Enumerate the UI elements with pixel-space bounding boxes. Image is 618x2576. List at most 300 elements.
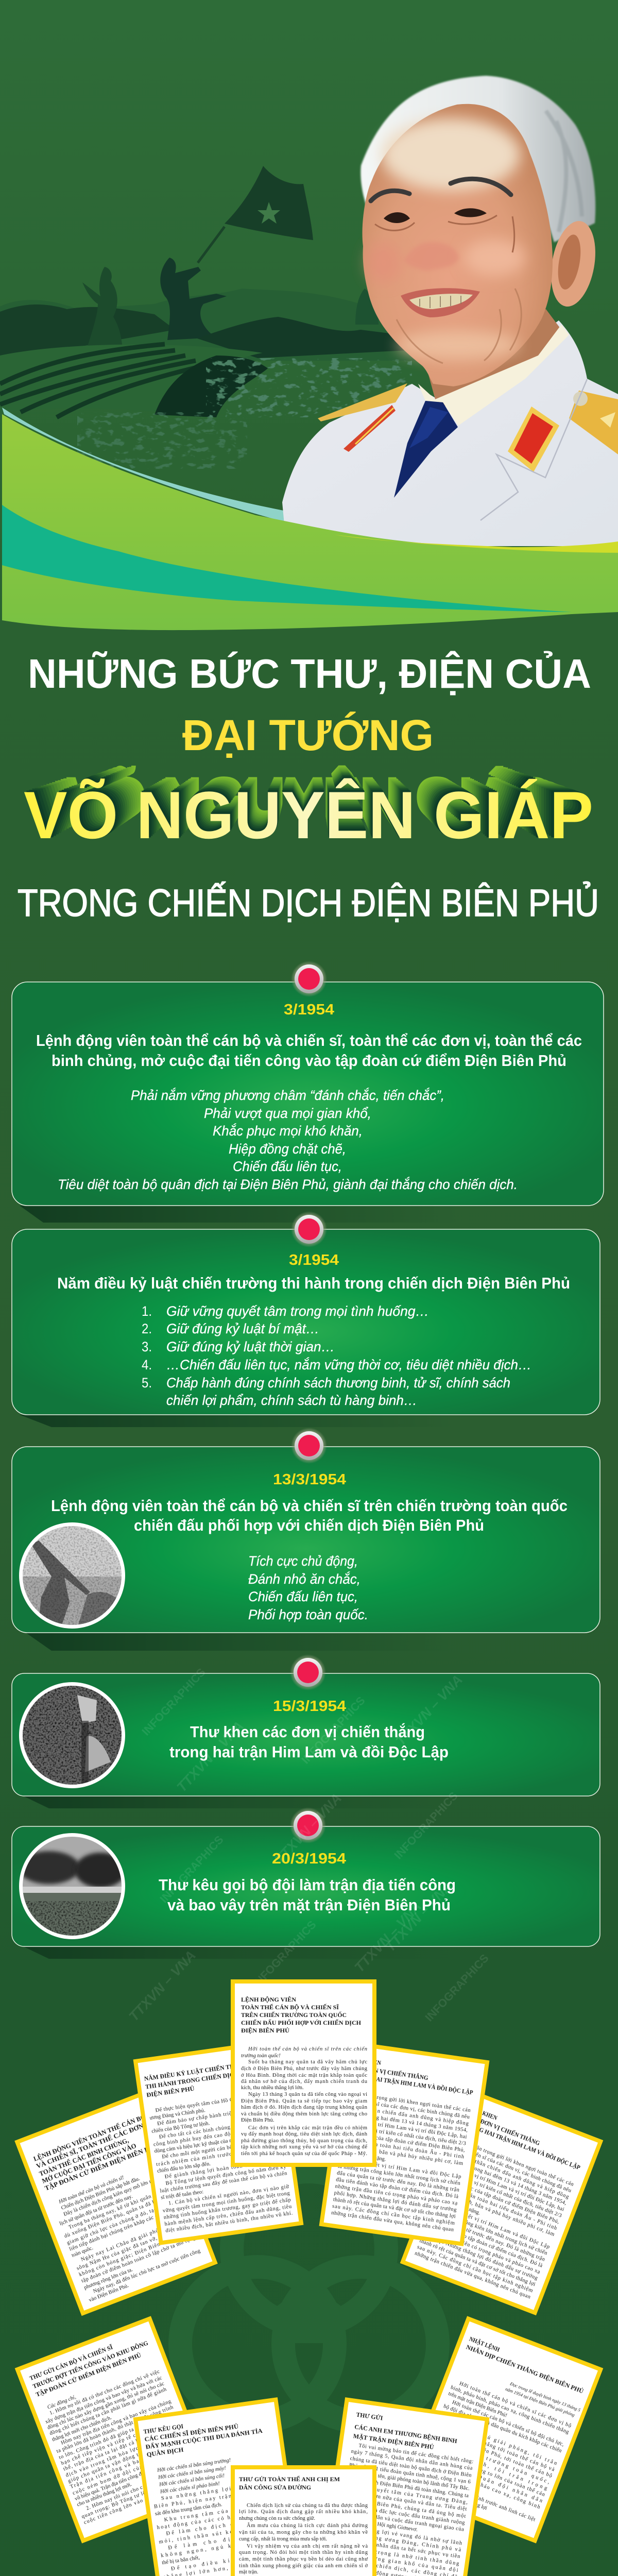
document: right lower: tuyến, quan trọng là nhờ tinh thần dũng [337, 2544, 460, 2567]
document: right lower: cảm, chịu đựng gian khổ của quân đội [336, 2551, 458, 2573]
timeline dot [290, 1654, 326, 1690]
document: far right lower: trường toàn quốc! [440, 2410, 478, 2429]
document: centre upper: phá đường giao thông thủy, bộ quan trọng của địch, [241, 2138, 367, 2144]
watermarks above documents: INFOGRAPHICS [422, 1952, 491, 2024]
document: left upper: Để cho tất cả các binh chủng bộ binh, pháo binh, [159, 2117, 280, 2140]
watermarks above documents: INFOGRAPHICS [250, 1918, 319, 1990]
document: far left lower: quan trọng: Bộ Tổng tư lệnh quyết định mở đợt [81, 2470, 199, 2520]
nose [404, 242, 459, 271]
document: far left lower: giúp cho quân ta vận động tiếp cận quân địch. [67, 2434, 185, 2484]
document: centre upper: hãm địch ở đó. Hiện địch đang tập trung không quân [241, 2105, 368, 2110]
timeline dot [291, 1211, 327, 1247]
date: 3/1954 [289, 1252, 339, 1268]
document: far right lower: sĩ đã hy sinh oanh liệt cho thắng lợi [414, 2479, 488, 2512]
document: centre upper: TOÀN THỂ CÁN BỘ VÀ CHIẾN SĨ [241, 2003, 339, 2011]
document: centre upper: địch ở Điện Biên Phủ, như trước đây vây hãm chúng [241, 2066, 368, 2072]
document: left lower [133, 2397, 303, 2576]
document: far right upper: đấu của quân ta từ trước đến nay. Đó là những trận [428, 2213, 546, 2263]
document: far right upper: bộ và chiến sĩ của các đơn vị, các binh chủng đã nêu [455, 2144, 572, 2194]
tie [394, 401, 458, 498]
document: centre lower: cảm, một tinh thần phục vụ bền bỉ dẻo dai cũng như [239, 2556, 368, 2562]
document: far right upper: khu phía Bắc của tập đoàn cứ điểm Điện Biên Phủ, [442, 2175, 560, 2225]
left epaulette [318, 383, 407, 421]
panel: 13/3/1954 [12, 1428, 600, 1651]
document: far left lower: cuộc tiến công lớn vào quân địch ở khu đông [83, 2476, 202, 2526]
panel: 15/3/1954 [12, 1654, 600, 1808]
document: far right lower: anh hùng [419, 2466, 440, 2479]
header bands: lime and teal waves [2, 414, 618, 630]
document: far right upper: phối hợp. Những thắng lợi đó đánh dấu sự trưởng [421, 2232, 539, 2281]
document: centre lower: mặt trận. [239, 2569, 258, 2575]
watermarks: INFOGRAPHICS [299, 1694, 368, 1766]
heading: Thư kêu gọi bộ đội làm trận địa tiến công [159, 1876, 456, 1894]
document: centre upper: kích, thu nhiều thắng lợi lớn. [241, 2085, 304, 2091]
document: far left upper: Hỡi toàn thể cán bộ và chiến sĩ! [58, 2175, 125, 2205]
document: far right lower: trọng báo tin đại thắng tới toàn thể cán bộ và [436, 2422, 555, 2473]
document: right upper: trong những vị trí kiên cố nhất của địch, tiêu diệt 2/3 [343, 2124, 466, 2147]
document: far left lower: cuộc ném bom dữ dội của không quân địch [72, 2446, 191, 2496]
document: far right lower: NHẬT LỆNH [468, 2335, 501, 2353]
document: right upper: tiêu diệt hoàn toàn hai tiểu đoàn Âu - Phi tinh [341, 2137, 465, 2160]
document: left upper: vững quyết tâm trong mọi tình huống, đặc biệt trong [162, 2191, 290, 2214]
watermarks: TTXVN – VNA [392, 1672, 466, 1749]
document: left upper: Để cho mỗi một người cán bộ và chiến sĩ nâng cao [162, 2138, 283, 2160]
timeline dot [291, 1428, 327, 1464]
document: centre upper: Các đơn vị trên khắp các mặt trận đều có nhiệm [248, 2125, 367, 2131]
heading: Lệnh động viên toàn thể cán bộ và chiến sĩ trên chiến trường toàn quốc [51, 1497, 568, 1515]
numbered list: Giữ đúng kỷ luật thời gian… [166, 1339, 335, 1354]
heading: trong hai trận Him Lam và đồi Độc Lập [169, 1743, 449, 1761]
document: far right lower: trên mặt trận Điện Biên Phủ! [448, 2391, 508, 2419]
document: left lower: Để làm cho địch càng ngày càng [166, 2514, 287, 2537]
watermarks above documents: TTXVN – VNA [126, 1947, 199, 2024]
document: far left lower: địch vào trong tầm hỏa lực súng của ta. Nó [65, 2429, 183, 2479]
document: right upper: là những trận công kiên lớn nhất trong lịch sử chiến [337, 2164, 461, 2187]
document: right upper [319, 2040, 489, 2246]
document: far right lower: bộ binh, pháo binh, pháo cao xạ, công binh [421, 2460, 541, 2511]
title line 3 3D extrusion: VÕ NGUYÊN GIÁP [55, 769, 562, 836]
document: centre upper: LỆNH ĐỘNG VIÊN [241, 1996, 296, 2003]
document: far right lower: binh, pháo binh, pháo cao xạ, công binh chiến thắng [450, 2385, 570, 2435]
document: far right lower: tuyên dương công trạng to lớn của toàn thể cán [426, 2447, 546, 2498]
watermarks above documents: TTXVN – VNA [351, 1899, 424, 1975]
timeline dot [291, 961, 327, 997]
title [18, 651, 599, 924]
document: centre upper: CHIẾN ĐẤU PHỐI HỢP VỚI CHIẾN DỊCH [241, 2019, 362, 2026]
eyes [384, 208, 487, 223]
document: left lower: không ngon, ngủ không yên, luôn [161, 2535, 290, 2559]
document: left upper: công binh phát huy đến cao độ tinh thần chiến đấu [153, 2124, 281, 2148]
document: far right upper [400, 2088, 603, 2315]
document: right lower: Tôi vui mừng báo tin để các đồng chí biết rằng: [358, 2443, 474, 2465]
numbered list: 5. [142, 1375, 152, 1391]
document: far left lower [15, 2316, 218, 2544]
heading: và bao vây trên mặt trận Điện Biên Phủ [167, 1896, 451, 1914]
document: far right upper: tiêu diệt hoàn toàn hai tiểu đoàn Âu - Phi tinh [440, 2181, 558, 2231]
document: left upper: diệt nhiều địch, bắt nhiều tù binh, thu nhiều vũ khí. [165, 2210, 293, 2234]
watermarks [157, 1789, 460, 1955]
document: far right upper: THƯ KHEN [469, 2105, 499, 2122]
heading: chiến đấu phối hợp với chiến dịch Điện Biên Phủ [134, 1516, 484, 1534]
document: far right lower: bộ đội địa phương và dân quân du kích khắp các chiến [442, 2403, 563, 2454]
document: far left upper: vào Điện Biên Phủ. [88, 2283, 130, 2303]
document: right upper: đã tiêu diệt vị trí Him Lam và vị trí đồi Độc Lập, hai [344, 2117, 467, 2140]
document: far right upper: Trận tiêu diệt vị trí Him Lam và đồi Độc Lập [439, 2202, 551, 2250]
eyebrows [371, 179, 511, 201]
heading [169, 1722, 449, 1761]
hair [360, 76, 595, 242]
document: far right upper: cao tinh thần chiến đấu anh dũng và hiệp đồng [452, 2150, 570, 2200]
numbered list: 3. [142, 1339, 152, 1354]
document: far right lower: năm 1954 tại Điện Biên Phủ giải phóng [505, 2386, 576, 2418]
quote: Chiến đấu liên tục, [248, 1589, 358, 1604]
document: left lower: thể bị ta bắn chết, [162, 2555, 200, 2566]
document: centre upper: và chuẩn bị điều động thêm binh lực tăng cường cho [241, 2111, 367, 2117]
numbered list: Giữ vững quyết tâm trong mọi tình huống… [166, 1303, 429, 1319]
document: right upper: đầu tiên đánh vào tập đoàn cứ điểm của địch. Đó là [336, 2177, 459, 2200]
document: far left upper: Đây là chiến dịch công kiên quy mô lớn nhất trong [63, 2171, 172, 2217]
panel: 3/1954 order [12, 961, 604, 1223]
document: far left upper: MỞ CUỘC ĐẠI TIẾN CÔNG VÀO [41, 2142, 138, 2185]
document: right lower: đất của nhân dân và cuộc đấu tranh ngoại giao của [342, 2510, 465, 2533]
document: far left upper: phương rộng lớn của ta. [83, 2267, 133, 2291]
document: centre lower: Vì vậy nhiệm vụ của anh chị em rất nặng nề và [247, 2544, 368, 2549]
shirt [418, 325, 569, 426]
document: left upper: chiến của Bộ Tổng tư lệnh. [151, 2121, 210, 2134]
document: left lower: QUÂN ĐỊCH [146, 2446, 184, 2458]
watermarks: TTXVN – VNA [271, 1790, 345, 1867]
document: left lower: mỏi, tinh thần sút kém, thương vong [159, 2521, 288, 2545]
uniform jacket [282, 320, 618, 546]
document: left upper: những tình huống khẩn trương, gay go triệt để chấp [163, 2197, 291, 2221]
document: far right lower: và chiến sĩ Điện Biên Phủ, tới toàn thể cán bộ [433, 2429, 553, 2479]
document: far left lower: Hôm nay trận địa tiến công và bao vây của chúng [60, 2399, 172, 2446]
document: far left upper: LỆNH ĐỘNG VIÊN TOÀN THỂ CÁN BỘ [32, 2113, 147, 2163]
document: centre lower [231, 2465, 376, 2576]
document: left upper: trách nhiệm của mình trước tổ quốc trong trận [156, 2144, 284, 2167]
timeline dot [290, 1807, 326, 1843]
numbered list: Chấp hành đúng chính sách thương binh, tử sĩ, chính sách [166, 1375, 510, 1391]
document: right lower: cách to lớn và đắc lực cuộc đấu tranh giành ruộng [343, 2503, 466, 2526]
document: centre lower: lợi lớn. Quân địch đang gặp rất nhiều khó khăn, [239, 2509, 368, 2515]
document: far right lower: Điện Biên Phủ giải phóng, tôi trân [444, 2418, 558, 2467]
document: far left lower: hạn chế tiếp viện và tiếp tế của địch, đẩy vào [60, 2416, 179, 2466]
document: far left lower: xây dựng trận địa tiến công và bao vây và hứa với các [44, 2375, 163, 2425]
document: far right lower: Hỡi toàn thể các cán bộ và chiến sĩ bộ đội chủ lực, [451, 2400, 565, 2448]
document: far right upper: TRONG HAI TRẬN HIM LAM VÀ ĐỒI ĐỘC LẬP [464, 2120, 581, 2171]
document: left lower: Biên Phủ, hiện nay trận địa bao vây đã [153, 2486, 283, 2510]
document: right upper: Trận tiêu diệt vị trí Him Lam và đồi Độc Lập [345, 2158, 461, 2180]
title line 3 3D extrusion: VÕ NGUYÊN GIÁP [38, 773, 579, 845]
title line 3 3D extrusion: VÕ NGUYÊN GIÁP [58, 768, 559, 834]
document: far left upper: giam giữ chủ lực của chúng ở đó, tạo điều kiện [66, 2197, 182, 2246]
document: far right lower: Tôi kính cẩn nghiêng mình trước anh linh các liệt [422, 2475, 536, 2523]
quote: Phải nắm vững phương châm “đánh chắc, tiến chắc”, [131, 1087, 444, 1103]
document: centre lower: Âm mưu của chúng là tích cực đánh phá đường [247, 2522, 368, 2529]
document: right upper: TRONG HAI TRẬN HIM LAM VÀ ĐỒI ĐỘC LẬP [350, 2071, 474, 2096]
document: far left lower: Các đồng chí, [46, 2394, 77, 2411]
document: right upper: những trận đầu tiên có trọng pháo và pháo cao xạ [335, 2183, 458, 2206]
document: centre lower: Chiến dịch lịch sử của chúng ta đã thu được thắng [247, 2503, 368, 2509]
document: right upper: CÁC ĐƠN VỊ CHIẾN THẮNG [351, 2063, 429, 2081]
document: centre upper: trường toàn quốc! [241, 2053, 281, 2059]
neck [427, 309, 561, 407]
numbered list [142, 1303, 531, 1408]
document: right upper: khu phía Bắc của tập đoàn cứ điểm Điện Biên Phủ, [342, 2130, 465, 2153]
document: centre upper: đã nhân sơ hở của địch, đẩy mạnh chiến tranh du [241, 2079, 368, 2084]
watermarks: TTXVN – VNA [174, 1718, 247, 1795]
document: centre upper: Suốt ba tháng nay quân ta đã vây hãm chủ lực [248, 2059, 367, 2065]
document: far left upper: Trong ba tháng nay, kể từ khi quân địch nhảy [68, 2184, 177, 2230]
document: far left upper: TẬP ĐOÀN CỨ ĐIỂM ĐIỆN BIÊN PHỦ [44, 2141, 160, 2192]
numbered list: chiến lợi phẩm, chính sách tù hàng binh… [166, 1393, 417, 1408]
document: left lower: THƯ KÊU GỌI [143, 2422, 184, 2435]
document: far right upper: đầu tiên đánh vào tập đoàn cứ điểm của địch. Đó là [426, 2219, 543, 2269]
quote [248, 1553, 368, 1622]
document: far right upper: cho địch bị thất nặng. [436, 2194, 481, 2216]
document: centre upper: Điện Biên Phủ. Quân ta sẽ tiếp tục bao vây giam [241, 2098, 367, 2104]
heading: Năm điều kỷ luật chiến trường thi hành trong chiến dịch Điện Biên Phủ [57, 1274, 570, 1292]
title line 1: NHỮNG BỨC THƯ, ĐIỆN CỦA [28, 651, 591, 697]
date: 20/3/1954 [272, 1851, 346, 1867]
document: left lower: Sau những thắng lợi to lớn ở Điện [161, 2479, 282, 2501]
watermarks: INFOGRAPHICS [391, 1789, 460, 1861]
document: right lower: Bác, nhờ toàn nhân dân ta hết sức phục vụ tiền [338, 2537, 461, 2560]
document: far left lower: Trận địa tiến công và bao vây đã làm cho [70, 2440, 188, 2490]
face [363, 104, 553, 386]
document: right upper: cao tinh thần chiến đấu anh dũng và hiệp đồng [346, 2104, 469, 2127]
document: left lower: ĐẨY MẠNH CUỘC THI ĐUA ĐÁNH TỈA [145, 2427, 263, 2451]
document: right lower: nghìn 2 trăm tên, giải phóng toàn bộ lãnh thổ Tây Bắc. [348, 2469, 470, 2492]
document: left upper: chiến đấu to lớn sắp đến. [157, 2161, 211, 2174]
document: far left upper: không còn bóng giặc; Điện Biên Phủ lại càng [78, 2229, 194, 2278]
document: centre upper: tiến tới phá kế hoạch quân sự của đế quốc Pháp - Mỹ. [241, 2151, 367, 2157]
ear [545, 217, 602, 310]
document: right lower: lớn lao to hơn nữa của quân và dân ta. Tiêu diệt [345, 2489, 467, 2512]
document: left lower: CÁC CHIẾN SĨ ĐIỆN BIÊN PHỦ [144, 2422, 239, 2443]
numbered list: 4. [142, 1357, 152, 1372]
date: 3/1954 [284, 1002, 334, 1018]
document: far right upper: chặt chẽ trong hai đêm 13 và 14 tháng 3 năm 1954, [450, 2157, 567, 2206]
document: right lower: Chiến thắng lợi vẻ vang đó là nhờ sự lãnh [347, 2524, 462, 2546]
document: far right upper: đã tiêu diệt vị trí Him Lam và vị trí đồi Độc Lập, hai [448, 2163, 565, 2213]
document: right lower: chúng ta đã tiêu diệt toàn bộ quân địch ở Điện Biên [350, 2456, 472, 2479]
document: far left lower: 1. Hôm nọ tôi đã có thư cho các đồng chí về việc [49, 2369, 161, 2416]
document: centre lower: nhưng chúng còn ra sức chống giữ. [239, 2516, 315, 2521]
document: right upper: phối hợp. Những thắng lợi đó đánh dấu sự trưởng [334, 2190, 457, 2213]
document: far left upper: tập đoàn cứ điểm hoàn toàn cô lập chờ ta mở rộng [81, 2235, 197, 2284]
panel: 20/3/1954 [12, 1789, 600, 1959]
document: left lower: Để tạo điều kiện cho quân ta [170, 2549, 291, 2572]
document: right lower: THƯ GỬI [356, 2411, 384, 2422]
document: far right upper: trong những vị trí kiên cố nhất của địch, tiêu diệt 2/3 [445, 2169, 562, 2219]
document: far right lower: Đọc trong lễ duyệt binh ngày 13 tháng 5 [509, 2381, 581, 2413]
document: far left upper: Chiến dịch Điện Biên Phủ sắp bắt đầu. [60, 2176, 141, 2211]
document: left upper: ương Đảng và Chính phủ. [149, 2108, 205, 2121]
quote [58, 1087, 518, 1192]
date: 13/3/1954 [273, 1471, 346, 1488]
document: left upper: ĐIỆN BIÊN PHỦ [146, 2084, 195, 2098]
wrinkles [397, 289, 521, 363]
date: 15/3/1954 [273, 1698, 346, 1715]
right collar tab [508, 406, 559, 472]
document: far left lower: cho ta nhiều thắng lợi mới. [76, 2482, 133, 2508]
heading [51, 1497, 568, 1534]
title line 2: ĐẠI TƯỚNG [182, 711, 434, 759]
watermarks: INFOGRAPHICS [139, 1666, 208, 1738]
numbered list: …Chiến đấu liên tục, nắm vững thời cơ, tiêu diệt nhiều địch… [166, 1357, 531, 1372]
title line 3 3D extrusion: VÕ NGUYÊN GIÁP [41, 773, 576, 843]
document: far left upper: VÀ CHIẾN SĨ, TOÀN THỂ CÁC ĐƠN VỊ [35, 2119, 153, 2170]
document: far right upper: sau này. Các đồng chí cần học tập kinh nghiệm [416, 2244, 534, 2294]
document: far right lower [400, 2316, 603, 2544]
panel: 3/1954 five disciplines [12, 1211, 600, 1427]
quote: Phối hợp toàn quốc. [248, 1607, 368, 1622]
document: centre upper: Hỡi toàn thể cán bộ và chiến sĩ trên các chiến [248, 2046, 367, 2052]
document: left upper: dũng cảm và hiệu lực kỹ thuật của mình. [154, 2137, 242, 2154]
document: left lower: sát đến khu trung tâm của địch. [154, 2502, 222, 2517]
document: far left upper: Ngày nay, đã đến lúc chủ lực ta mở cuộc tiến công [92, 2248, 201, 2294]
document: far left upper: lịch sử quân đội ta từ trước đến nay. [59, 2194, 133, 2227]
document: right upper: đấu của quân ta từ trước đến nay. Đó là những trận [336, 2170, 460, 2193]
document: centre lower: cung cấp, nhất là trong mùa mưa sắp tới. [239, 2536, 327, 2542]
document: far left upper: toàn quốc. [71, 2245, 94, 2259]
document: left upper: Để giành thắng lợi hoàn toàn cho chiến dịch. [164, 2157, 285, 2180]
document: far left lower: thế, trận địa của ta lại đặt cả khu trung tâm của [62, 2422, 181, 2472]
document: left upper: THI HÀNH TRONG CHIẾN DỊCH [145, 2070, 239, 2091]
document: far right upper: những trận chiến đấu vừa qua, không nên chủ quan [414, 2250, 531, 2300]
document: right lower: Chiến dịch Điện Biên Phủ đã toàn thắng. Chúng ta [353, 2477, 469, 2499]
title line 3 3D extrusion: VÕ NGUYÊN GIÁP [49, 770, 568, 839]
document: right upper: bộ và chiến sĩ của các đơn vị, các binh chủng đã nêu [347, 2097, 470, 2120]
numbered list: 1. [142, 1303, 152, 1319]
heading: binh chủng, mở cuộc đại tiến công vào tập đoàn cứ điểm Điện Biên Phủ [52, 1052, 566, 1070]
document: right upper: nhuệ của địch, bắn và phá hủy nhiều phi cơ, làm [340, 2144, 464, 2166]
document: centre upper: TRÊN CHIẾN TRƯỜNG TOÀN QUỐC [241, 2011, 347, 2019]
document: right lower: Chính phủ ta tại Hội nghị Giơnevơ. [341, 2516, 418, 2533]
document: right lower: đạo của Trung ương Đảng, Chính phủ và [339, 2530, 461, 2553]
document: far left lower: thắng lợi mới cho chiến dịch. [52, 2415, 112, 2443]
photo: soldiers in foliage [19, 1682, 125, 1788]
watermarks above documents [126, 1899, 491, 2024]
document: far left upper: Ngày nay Lai Châu đã giải phóng, phía tây [80, 2216, 190, 2263]
photo: soldiers with anti-aircraft gun [19, 1522, 125, 1629]
document: far right upper: CÁC ĐƠN VỊ CHIẾN THẮNG [466, 2112, 541, 2147]
document: left lower: Hỡi các chiến sĩ bắn súng cối! [158, 2473, 225, 2488]
document: far right lower: và Hồ Chủ tịch, tôi trân trọng [428, 2441, 548, 2492]
document: centre lower: quan trọng. Nó đòi hỏi một tinh thần hy sinh dũng [239, 2550, 368, 2555]
photo: smoke over battlefield [18, 1833, 126, 1939]
document: centre upper: Ngày 13 tháng 3 quân ta đã tiến công vào ngoại vi [248, 2092, 367, 2097]
quote: Đánh nhỏ ăn chắc, [248, 1571, 360, 1587]
document: right upper: thành rõ rệt của quân ta và đặt cơ sở tốt cho thắng lợi [333, 2197, 456, 2219]
quote: Phải vượt qua mọi gian khổ, [204, 1106, 371, 1121]
document: right lower: ngày 7 tháng 5, Quân đội nhân dân anh hùng của [351, 2449, 473, 2471]
quote: Chiến đấu liên tục, [233, 1159, 342, 1174]
document: left lower: Hỡi các chiến sĩ pháo binh! [159, 2481, 220, 2495]
title line 3 3D extrusion: VÕ NGUYÊN GIÁP [52, 769, 565, 837]
document: far right upper: thành rõ rệt của quân ta và đặt cơ sở tốt cho thắng lợi [419, 2238, 536, 2287]
document: left upper: 1. Cán bộ và chiến sĩ người nào, đơn vị nào giữ [168, 2184, 289, 2207]
document: right upper: những trận chiến đấu vừa qua, không nên chủ quan [331, 2210, 454, 2233]
document: far right lower: bộ và chiến sĩ Quân đội nhân dân [423, 2453, 544, 2504]
quote: Khắc phục mọi khó khăn, [213, 1123, 363, 1139]
document: centre upper [231, 1979, 376, 2167]
document: far left lower: đồng chí lúc nào xây dựng gần xong, thì sẽ nói cho các [47, 2381, 165, 2431]
document: right lower [319, 2397, 489, 2576]
right epaulette [569, 391, 618, 454]
document: centre lower: tinh thần xung phong giết giặc của anh em chiến sĩ ở [239, 2563, 368, 2569]
heading [36, 1031, 582, 1070]
quote: Tích cực chủ động, [248, 1553, 358, 1569]
document: left upper: Bộ Tổng tư lệnh quyết định công bố năm điều kỷ [165, 2164, 287, 2187]
document: right upper: chặt chẽ trong hai đêm 13 và 14 tháng 3 năm 1954, [345, 2111, 468, 2133]
document: centre upper: ĐIỆN BIÊN PHỦ [241, 2027, 289, 2034]
document: far right upper: những trận đầu tiên có trọng pháo và pháo cao xạ [423, 2226, 541, 2275]
document: far left lower: to lớn. Công trình đó đã giúp ta hạn chế tiếp viện [58, 2411, 177, 2461]
document: left lower: Khu trung tâm của chúng hiện nay [164, 2500, 285, 2523]
document: far left upper: TOÀN THỂ CÁC BINH CHỦNG, [38, 2136, 130, 2178]
document: left lower: Để làm cho địch luôn luôn [168, 2529, 289, 2551]
document: left upper: luật chiến trường sau đây để toàn thể cán bộ và chiến [160, 2171, 288, 2194]
document: centre upper: ở Hòa Bình. Đồng thời các mặt trận khắp toàn quốc [241, 2073, 367, 2078]
document: far right lower: chiến sĩ chiến trường toàn quốc, [431, 2435, 551, 2485]
heading [159, 1876, 456, 1914]
document: far left lower: TRƯỚC ĐỢT TIẾN CÔNG VÀO KHU ĐÔNG [31, 2338, 149, 2390]
document: far left upper [14, 2089, 218, 2316]
document: centre lower: DÂN CÔNG SỬA ĐƯỜNG [239, 2484, 311, 2491]
watermarks: TTXVN – VNA [382, 1878, 455, 1955]
header: battlefield photo in green duotone [0, 166, 464, 469]
title line 3 3D extrusion: VÕ NGUYÊN GIÁP [32, 775, 585, 848]
document: right lower: MẶT TRẬN ĐIỆN BIÊN PHỦ [353, 2432, 435, 2451]
quote: Hiệp đồng chặt chẽ, [229, 1141, 346, 1157]
quote: Tiêu diệt toàn bộ quân địch tại Điện Biên Phủ, giành đại thắng cho chiến dịch. [58, 1176, 518, 1192]
document: centre upper: vụ đẩy mạnh hoạt động, tiêu diệt sinh lực địch, đánh [241, 2131, 368, 2137]
document: centre upper: tập kích những nơi xung yếu và sơ hở của chúng để [241, 2144, 367, 2150]
title line 3 3D extrusion: VÕ NGUYÊN GIÁP [46, 772, 571, 840]
document: left lower: hoạt động của các cỏ hỏa lực của chúng [157, 2507, 286, 2531]
document: far left upper: sông Nậm Hu của giặc đã tan vỡ, Phông Xa Lỳ [76, 2223, 192, 2272]
cheeks [366, 242, 401, 283]
title line 3 3D extrusion: VÕ NGUYÊN GIÁP [27, 777, 590, 851]
document: left upper: NĂM ĐIỀU KỶ LUẬT CHIẾN TRƯỜNG [144, 2059, 253, 2082]
document: left upper: Để thực hiện quyết tâm của Hồ Chủ tịch, của Trung [155, 2091, 277, 2113]
document: left lower: Hỡi các chiến sĩ bắn súng máy! [158, 2465, 227, 2481]
document: centre lower: vận tải của ta, mong gây cho ta những khó khăn về [239, 2530, 368, 2535]
document: right upper: cho địch bị thất nặng. [339, 2150, 386, 2162]
document: right lower: Phủ, gồm 21 tiểu đoàn quân tinh nhuệ, cộng 1 vạn 6 [349, 2462, 471, 2485]
emblem behind documents [180, 2172, 438, 2421]
watermarks: INFOGRAPHICS [157, 1833, 226, 1905]
document: right lower: CÁC ANH EM THƯƠNG BỆNH BINH [354, 2423, 458, 2445]
document: right lower: địch ở Điện Biên Phủ, chúng ta đã ủng hộ một [344, 2497, 466, 2519]
mouth [401, 288, 480, 317]
document: far right lower: NHÂN DỊP CHIẾN THẮNG ĐIỆN BIÊN PHỦ [465, 2343, 585, 2395]
document: far left lower: ta phần lớn đã hoàn thành, đó thật là một công trình [56, 2404, 175, 2454]
document: left upper: sĩ triệt để tuân theo: [161, 2189, 204, 2201]
document: right upper: sau này. Các đồng chí cần học tập kinh nghiệm [332, 2204, 455, 2226]
jacket lapel lines [480, 379, 587, 520]
title line 3: VÕ NGUYÊN GIÁP [24, 777, 593, 853]
title line 3 3D extrusion: VÕ NGUYÊN GIÁP [44, 772, 573, 842]
title line 3 3D extrusion: VÕ NGUYÊN GIÁP [61, 767, 556, 832]
document: far left lower: THƯ GỬI CÁN BỘ VÀ CHIẾN SĨ [28, 2343, 114, 2382]
document: left upper [133, 2039, 303, 2245]
document: far right upper: là những trận công kiên lớn nhất trong lịch sử chiến [431, 2207, 548, 2257]
left collar tab [344, 405, 396, 452]
document: far right upper: nhuệ của địch, bắn và phá hủy nhiều phi cơ, làm [438, 2188, 555, 2238]
